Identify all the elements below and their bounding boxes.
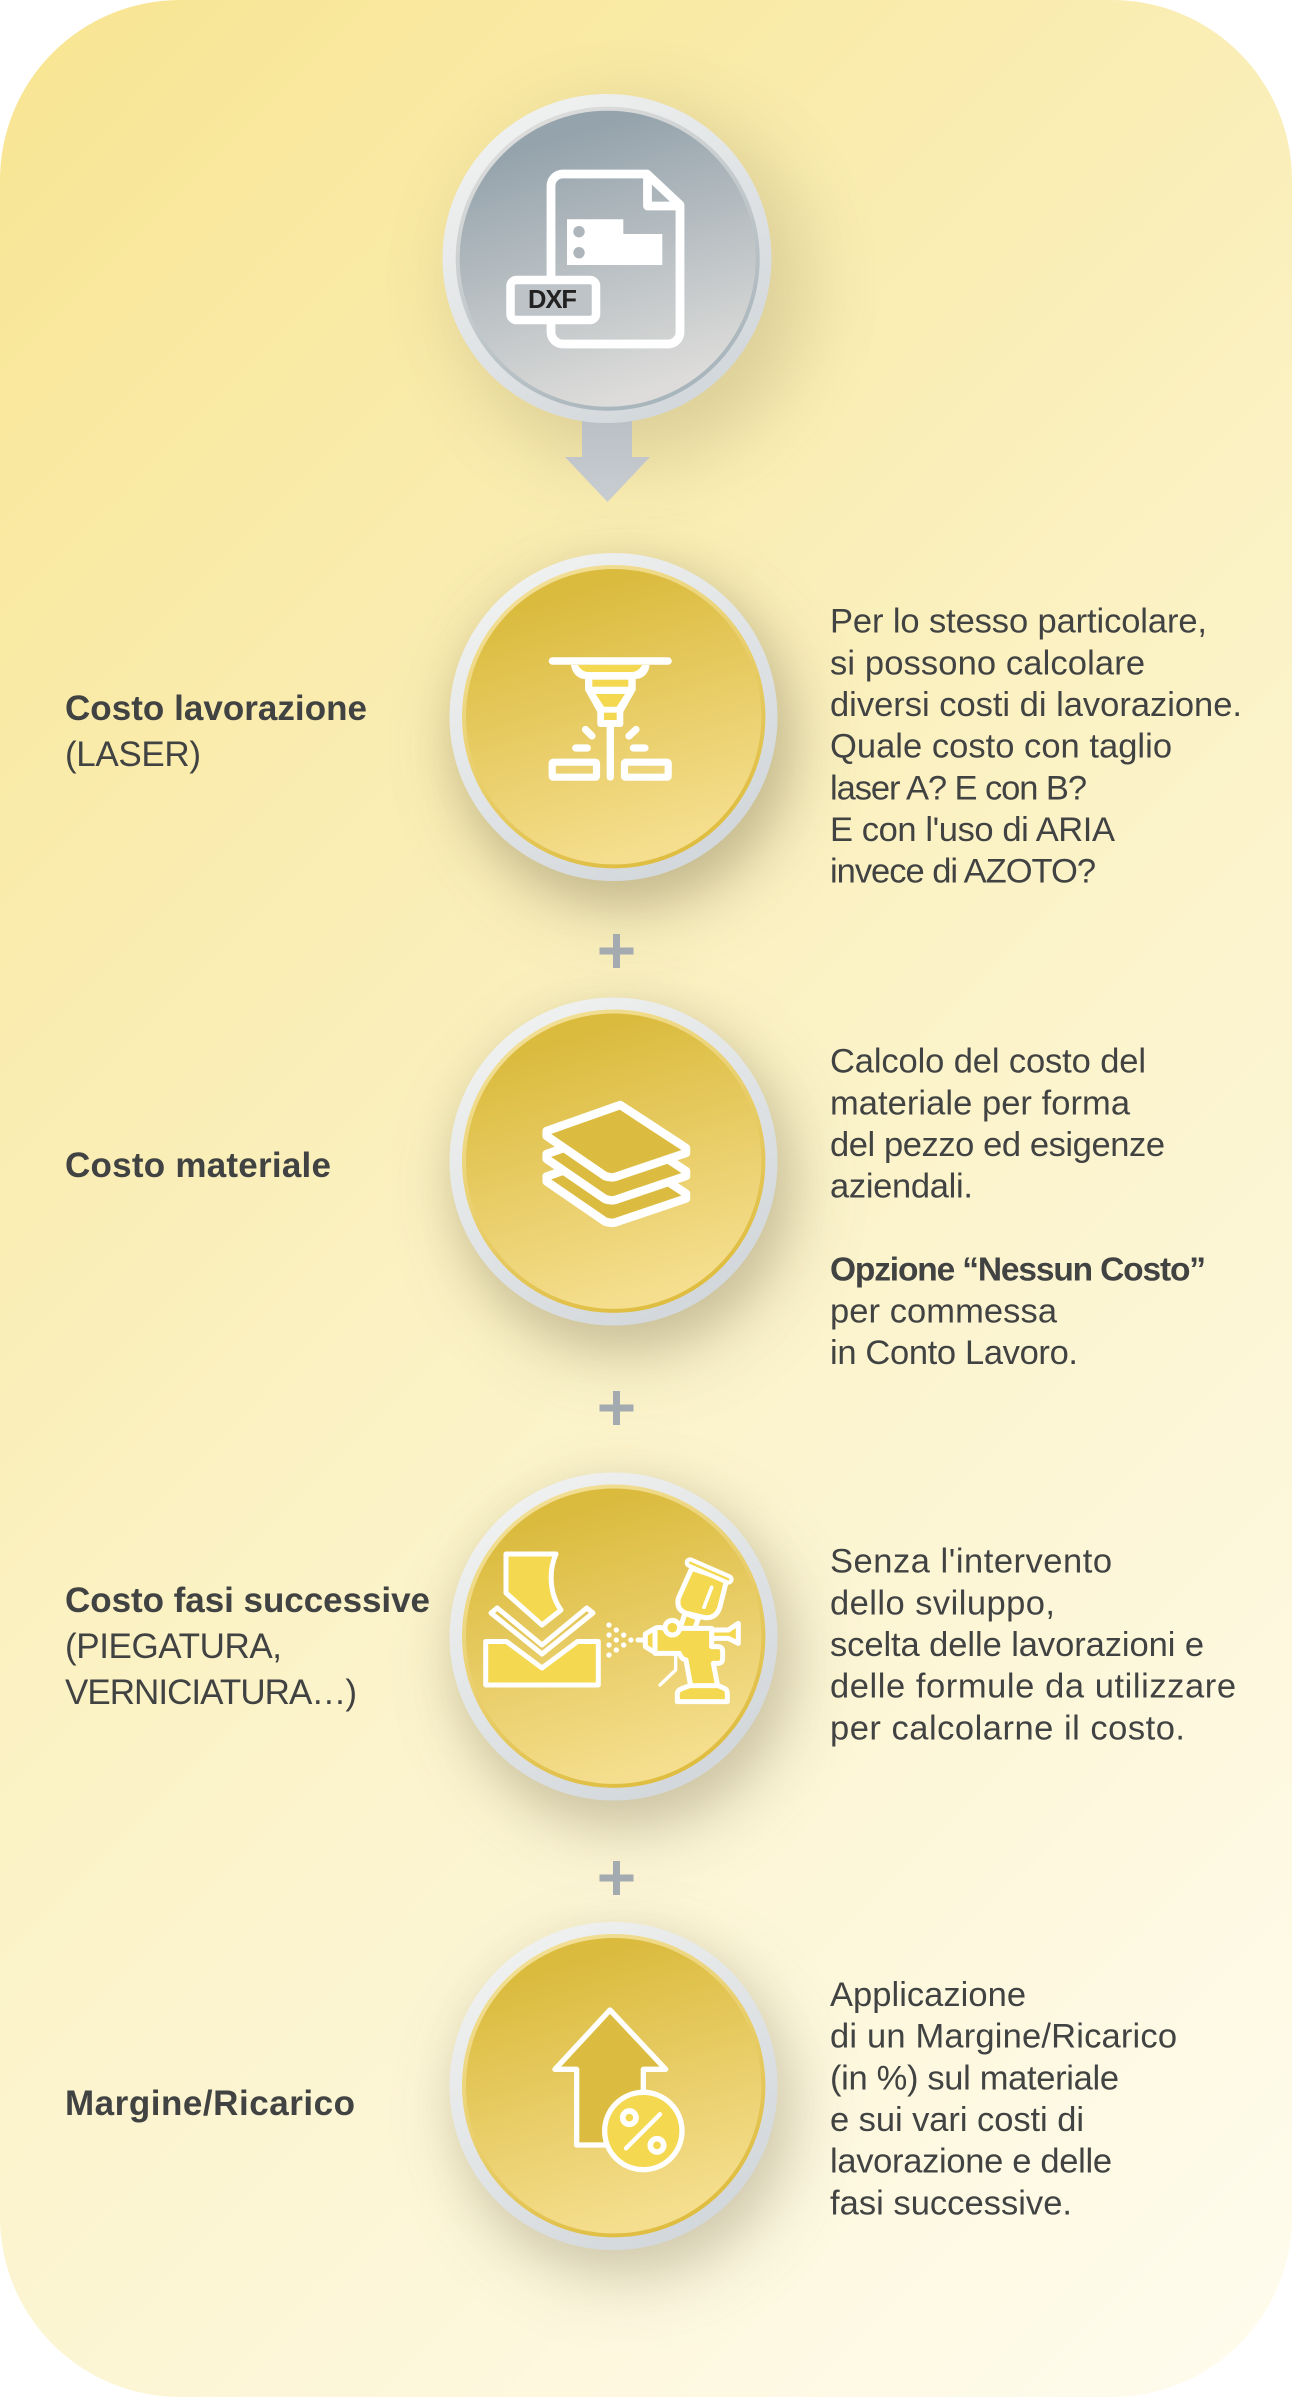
text block: material description: aziendali. [830, 1168, 973, 1206]
text block: margin description: (in %) sul materiale [830, 2059, 1119, 2097]
text block: material description [830, 1043, 1206, 1372]
step: subsequent phases cost [450, 1472, 800, 1837]
text block: margin description: Applicazione [830, 1976, 1026, 2014]
text block: subsequent phases description [830, 1543, 1236, 1747]
text block: subsequent phases description: per calcolarne il costo. [830, 1709, 1185, 1747]
label: subsequent phases cost: Costo fasi successive [65, 1581, 430, 1620]
text block: laser description: invece di AZOTO? [830, 853, 1096, 891]
text block: material description: del pezzo ed esigenze [830, 1126, 1165, 1164]
label: laser cost: Costo lavorazione [65, 689, 367, 728]
plus sign 3 [600, 1861, 634, 1895]
text block: subsequent phases description: Senza l'intervento [830, 1543, 1112, 1581]
text block: margin description: lavorazione e delle [830, 2143, 1112, 2181]
text block: margin description [830, 1976, 1177, 2222]
icon: spray gun [606, 1563, 738, 1702]
text block: margin description: di un Margine/Ricarico [830, 2018, 1177, 2056]
text block: laser description: E con l'uso di ARIA [830, 811, 1115, 849]
text block: laser description: Quale costo con taglio [830, 728, 1172, 766]
text block: material description: per commessa [830, 1292, 1058, 1330]
text block: subsequent phases description: delle formule da utilizzare [830, 1668, 1236, 1706]
text block: laser description: laser A? E con B? [830, 769, 1087, 807]
label: material cost: Costo materiale [65, 1146, 331, 1185]
label: subsequent phases cost [65, 1581, 430, 1712]
label: subsequent phases cost: VERNICIATURA…) [65, 1673, 357, 1712]
step: margin [450, 1922, 800, 2286]
label: subsequent phases cost: (PIEGATURA, [65, 1627, 282, 1666]
arrow: down [565, 420, 650, 502]
plus sign 2 [600, 1391, 634, 1425]
text block: subsequent phases description: scelta delle lavorazioni e [830, 1626, 1204, 1664]
icon: up arrow with percent [555, 2010, 682, 2170]
text block: margin description: e sui vari costi di [830, 2101, 1084, 2139]
step: DXF file [442, 94, 807, 502]
text block: laser description: diversi costi di lavorazione. [830, 686, 1242, 724]
text block: material description: in Conto Lavoro. [830, 1334, 1078, 1372]
text block: margin description: fasi successive. [830, 2184, 1072, 2222]
text block: laser description: Per lo stesso particolare, [830, 603, 1207, 641]
icon: stacked sheets [547, 1105, 686, 1223]
label: laser cost [65, 689, 367, 774]
label: margin: Margine/Ricarico [65, 2084, 355, 2123]
text block: material description: Opzione “Nessun Costo” [830, 1252, 1206, 1289]
text block: material description: materiale per forma [830, 1084, 1131, 1122]
text block: subsequent phases description: dello sviluppo, [830, 1584, 1055, 1622]
icon: laser head [552, 661, 668, 777]
text block: laser description: si possono calcolare [830, 644, 1145, 682]
step: material cost [450, 998, 800, 1362]
icon: DXF document: DXF [528, 286, 577, 314]
step: laser cost [450, 553, 800, 917]
plus sign 1 [600, 934, 634, 968]
icon: DXF document [510, 174, 680, 344]
text block: material description: Calcolo del costo del [830, 1043, 1146, 1081]
label: laser cost: (LASER) [65, 735, 201, 774]
text block: laser description [830, 603, 1242, 891]
icon: press brake [486, 1554, 598, 1685]
